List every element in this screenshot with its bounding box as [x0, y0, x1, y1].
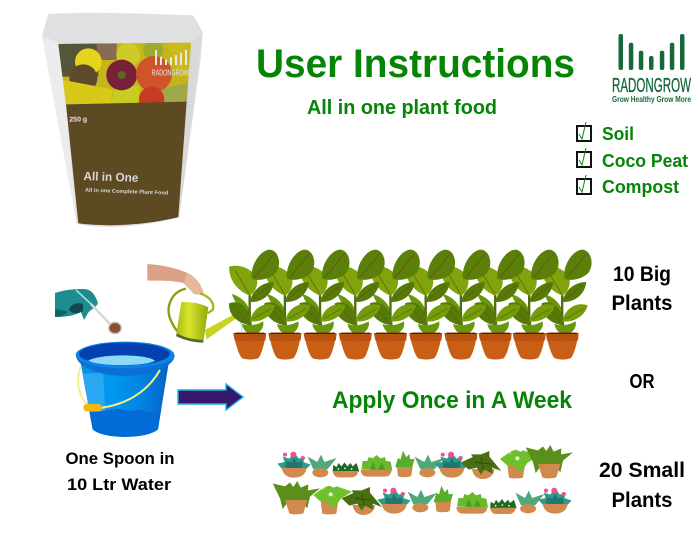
second row of small plants	[273, 481, 572, 515]
frequency instruction: Apply Once in A Week	[332, 387, 573, 414]
label: 10 big plants: 10 Big	[613, 263, 671, 286]
product pouch	[42, 13, 203, 227]
label: 20 small plants	[599, 459, 685, 512]
product pouch: All in one Complete Plant Food	[85, 188, 168, 197]
product pouch: 250 g	[69, 116, 87, 124]
caption: one spoon in water: One Spoon in	[66, 449, 174, 468]
first row of small plants	[277, 445, 573, 479]
label: 10 big plants: Plants	[612, 292, 672, 315]
product pouch: All in One	[83, 169, 139, 185]
checklist	[577, 122, 688, 197]
label: 20 small plants: 20 Small	[599, 459, 685, 482]
gloved hand with spoon	[55, 289, 122, 334]
brand logo	[612, 34, 691, 104]
water bucket	[76, 342, 175, 440]
label: 20 small plants: Plants	[612, 489, 672, 512]
arrow	[178, 384, 243, 410]
item: soil: Soil	[602, 124, 634, 144]
fruit label	[58, 42, 191, 104]
item: coco peat: Coco Peat	[602, 151, 688, 171]
product pouch: RADONGROW	[152, 67, 190, 77]
watering can with hand	[147, 264, 242, 343]
row of 10 big plants	[229, 250, 592, 359]
caption: one spoon in water	[66, 449, 174, 494]
item: compost: Compost	[602, 177, 679, 197]
pouch logo	[155, 50, 187, 65]
caption: one spoon in water: 10 Ltr Water	[67, 475, 171, 494]
title: User Instructions	[256, 42, 575, 86]
subtitle: All in one plant food	[307, 97, 497, 119]
label: 10 big plants	[612, 263, 672, 315]
label: or: OR	[630, 371, 655, 393]
